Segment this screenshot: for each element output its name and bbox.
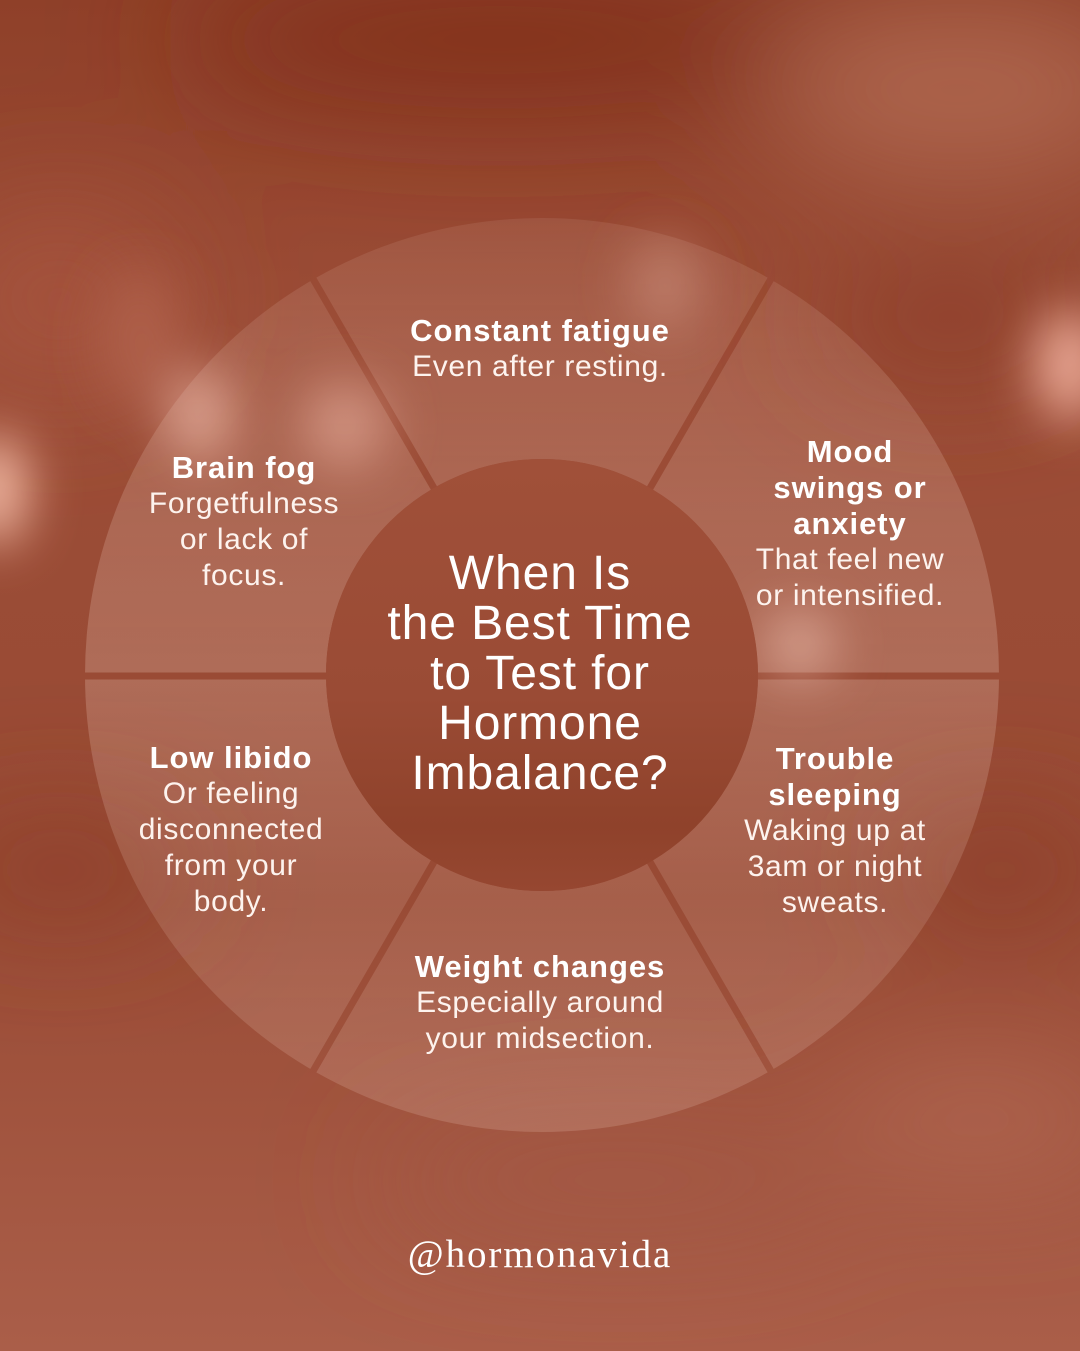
segment: trouble sleeping: Waking up at xyxy=(744,814,926,847)
segment: trouble sleeping xyxy=(744,741,926,919)
segment: mood swings: or intensified. xyxy=(756,579,944,612)
segment: low libido xyxy=(139,740,323,918)
segment: brain fog: Brain fog xyxy=(172,450,316,485)
segment: trouble sleeping: sweats. xyxy=(782,886,888,919)
segment: mood swings xyxy=(756,434,944,612)
segment: trouble sleeping: 3am or night xyxy=(748,850,922,883)
title: Hormone xyxy=(438,697,642,750)
segment: weight changes: your midsection. xyxy=(426,1022,654,1055)
segment: constant fatigue: Constant fatigue xyxy=(410,313,670,348)
segment: weight changes: Weight changes xyxy=(415,949,665,984)
segment: low libido: from your xyxy=(165,849,297,882)
donut wheel with six segments xyxy=(85,218,999,1132)
title: to Test for xyxy=(430,647,650,700)
title xyxy=(387,547,693,800)
segment: constant fatigue: Even after resting. xyxy=(412,350,668,383)
segment: mood swings: That feel new xyxy=(756,543,944,576)
wheel segments xyxy=(85,218,999,1132)
segment: constant fatigue xyxy=(410,313,670,383)
title: When Is xyxy=(449,547,631,600)
segment: low libido: Or feeling xyxy=(163,777,299,810)
title: Imbalance? xyxy=(411,747,669,800)
segment: brain fog: focus. xyxy=(202,559,286,592)
segment: low libido: Low libido xyxy=(150,740,312,775)
segment: mood swings: swings or xyxy=(773,470,927,505)
segment: weight changes xyxy=(414,949,665,1055)
segment: brain fog: or lack of xyxy=(180,523,308,556)
segment: weight changes: Especially around xyxy=(416,986,664,1019)
segment: mood swings: Mood xyxy=(807,434,893,469)
handle: @hormonavida xyxy=(408,1233,672,1276)
segment: low libido: body. xyxy=(194,885,268,918)
segment: brain fog xyxy=(149,450,339,592)
segment: trouble sleeping: Trouble xyxy=(776,741,894,776)
segment: brain fog: Forgetfulness xyxy=(149,487,339,520)
center circle xyxy=(326,459,758,891)
segment: low libido: disconnected xyxy=(139,813,323,846)
segment: mood swings: anxiety xyxy=(793,506,907,541)
title: the Best Time xyxy=(387,597,693,650)
segment: trouble sleeping: sleeping xyxy=(768,777,902,812)
